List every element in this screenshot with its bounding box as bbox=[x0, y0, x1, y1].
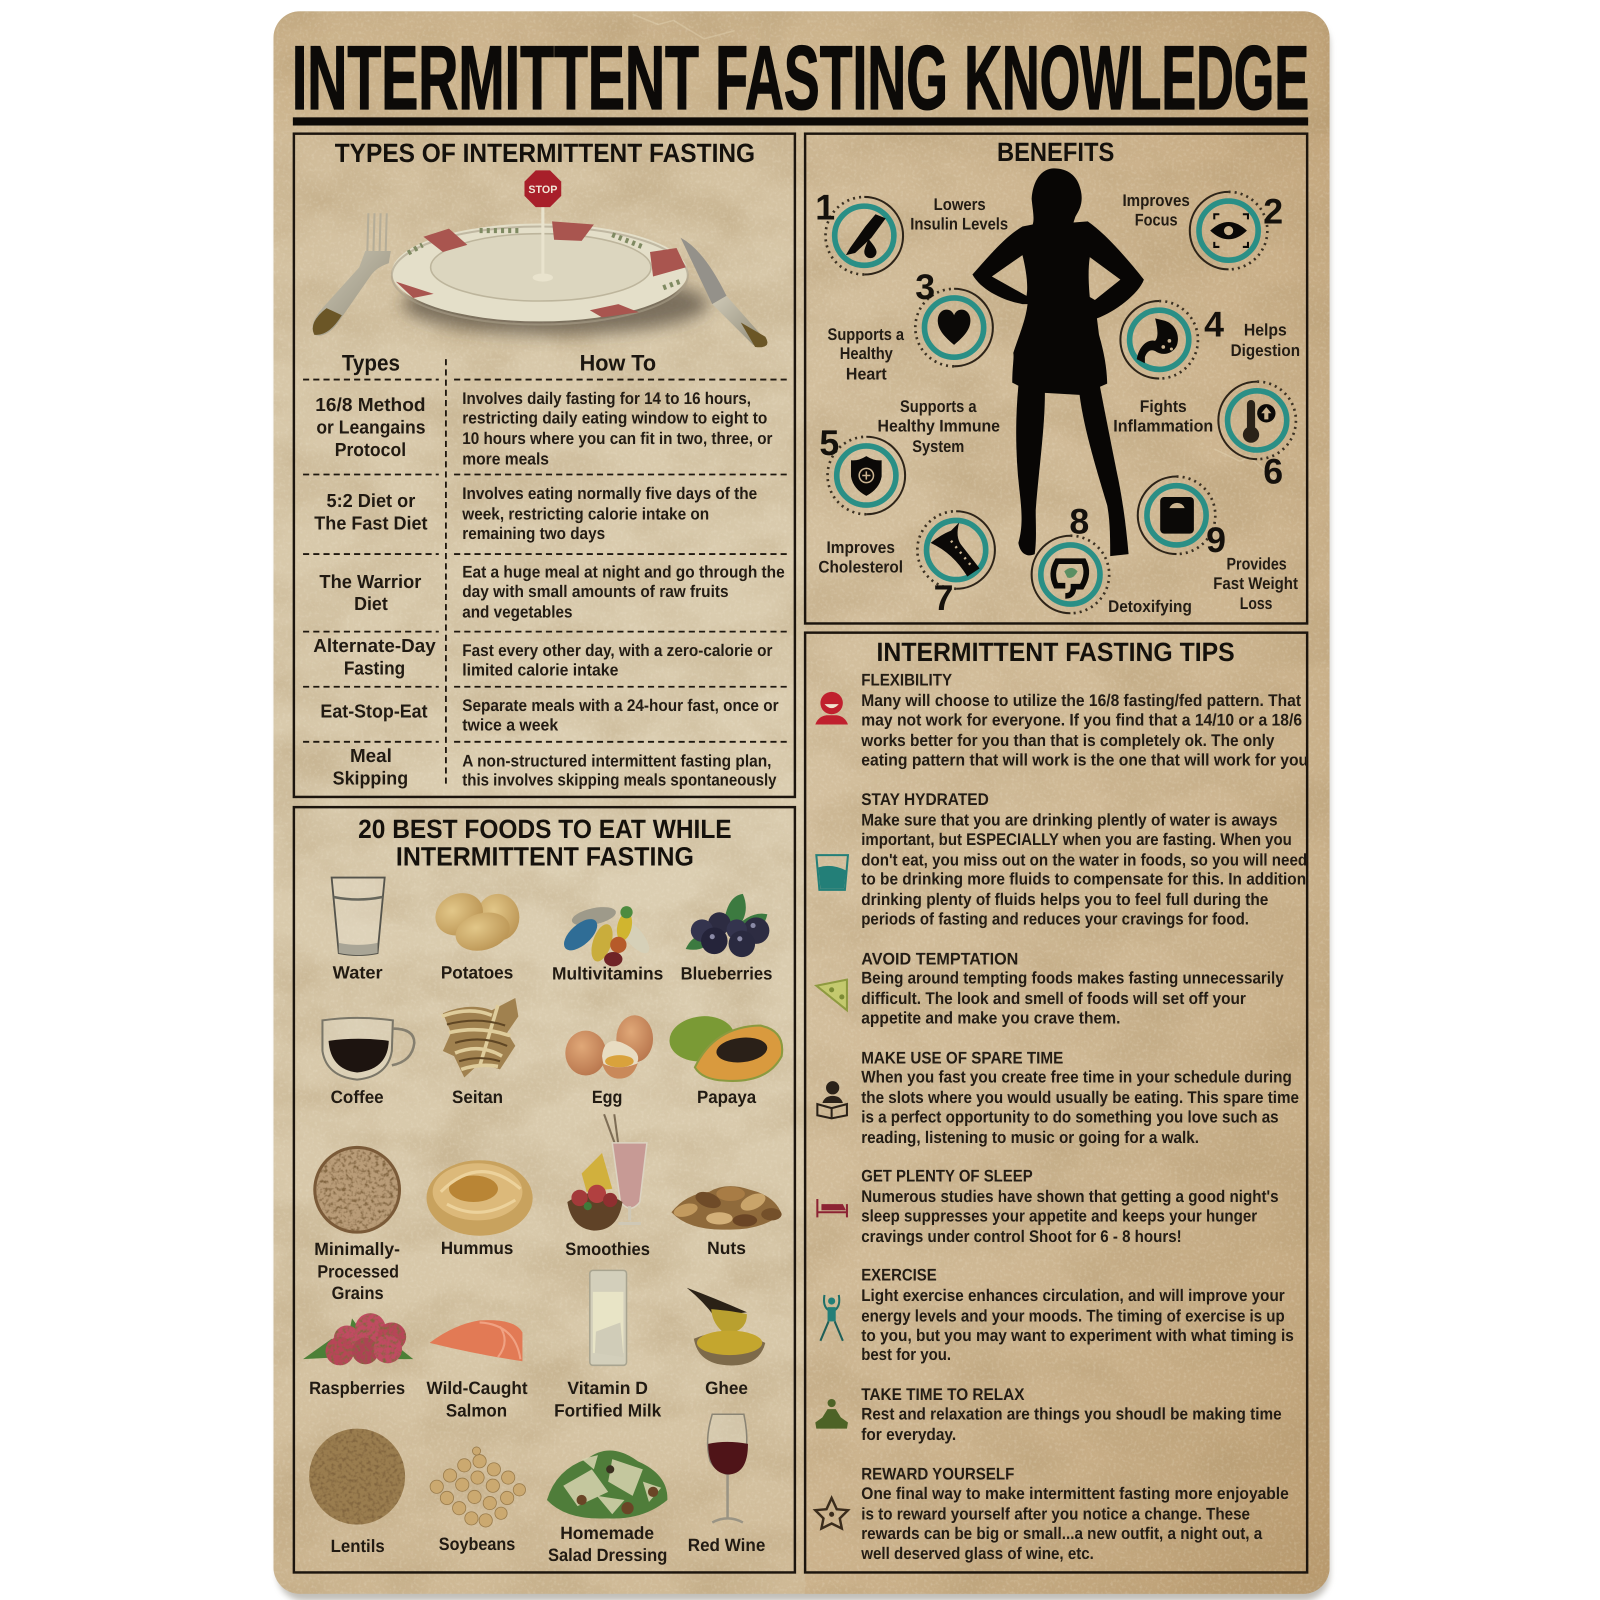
food: seitan bbox=[442, 998, 518, 1107]
table: types and how to: How To bbox=[580, 350, 656, 376]
food: homemade salad dressing: Homemade bbox=[560, 1522, 654, 1543]
food: papaya bbox=[667, 1013, 782, 1107]
row: alternate-day fasting: Fasting bbox=[344, 657, 405, 679]
tip: make use of spare time: MAKE USE OF SPARE TIME bbox=[861, 1049, 1063, 1067]
title: INTERMITTENT bbox=[292, 27, 699, 129]
benefit 7: improves cholesterol bbox=[818, 511, 995, 618]
benefit 7: improves cholesterol: Improves bbox=[827, 539, 895, 557]
icon: knife bbox=[681, 238, 767, 347]
row: warrior diet: day with small amounts of raw fruits bbox=[462, 583, 729, 601]
tip: flexibility: may not work for everyone. If you find that a 14/10 or a 18/6 bbox=[861, 711, 1302, 730]
row: warrior diet: Eat a huge meal at night and go through the bbox=[462, 563, 785, 582]
row: 16/8 method: or Leangains bbox=[316, 416, 426, 438]
food: potatoes: Potatoes bbox=[441, 962, 514, 983]
benefit 9: fast weight loss: 9 bbox=[1206, 520, 1226, 560]
tip: take time to relax bbox=[815, 1386, 1282, 1444]
icon: bed bbox=[817, 1199, 847, 1217]
title: FASTING bbox=[715, 27, 948, 129]
icon: happy person bbox=[815, 692, 848, 724]
food: red wine bbox=[688, 1414, 766, 1555]
benefit 9: fast weight loss bbox=[1138, 477, 1298, 613]
tip: take time to relax: for everyday. bbox=[861, 1426, 956, 1444]
food: multivitamins bbox=[552, 904, 664, 984]
tip: flexibility: FLEXIBILITY bbox=[861, 671, 952, 690]
tip: stay hydrated: Make sure that you are drinking plently of water is aways bbox=[861, 811, 1278, 830]
benefit 4: helps digestion: Helps bbox=[1244, 321, 1287, 340]
tip: avoid temptation bbox=[816, 950, 1284, 1028]
benefit 6: fights inflammation: Fights bbox=[1140, 398, 1187, 416]
food: wild-caught salmon bbox=[427, 1320, 528, 1420]
tip: avoid temptation: Being around tempting foods makes fasting unnecessarily bbox=[861, 969, 1284, 988]
row: eat-stop-eat: Eat-Stop-Eat bbox=[320, 700, 428, 721]
tip: make use of spare time: When you fast you create free time in your schedule during bbox=[861, 1068, 1292, 1087]
food: coffee bbox=[322, 1018, 414, 1107]
benefit 6: fights inflammation bbox=[1113, 382, 1296, 492]
row: 16/8 method: Involves daily fasting for 14 to 16 hours, bbox=[462, 390, 751, 408]
tip: exercise: energy levels and your moods. The timing of exercise is up bbox=[861, 1307, 1285, 1326]
tip: reward yourself: is to reward yourself after you notice a change. These bbox=[861, 1505, 1250, 1523]
panel heading: best foods: INTERMITTENT FASTING bbox=[396, 841, 694, 871]
tip: exercise: to you, but you may want to experiment with what timing is bbox=[861, 1327, 1294, 1345]
benefit 5: healthy immune system: Healthy Immune bbox=[878, 417, 1000, 436]
benefit 3: healthy heart: 3 bbox=[915, 267, 935, 307]
food: soybeans bbox=[430, 1447, 526, 1554]
benefit 9: fast weight loss: Provides bbox=[1227, 555, 1287, 573]
food: vitamin d fortified milk: Fortified Milk bbox=[554, 1400, 661, 1420]
row: meal skipping: A non-structured intermittent fasting plan, bbox=[462, 752, 771, 770]
food: egg: Egg bbox=[592, 1087, 622, 1107]
tip: avoid temptation: difficult. The look and smell of foods will set off your bbox=[861, 990, 1246, 1008]
icon: person reading bbox=[817, 1081, 847, 1118]
tip: stay hydrated: to be drinking more fluids to compensate for this. In addition bbox=[861, 870, 1306, 889]
row: 5:2 diet: Involves eating normally five days of the bbox=[462, 485, 757, 503]
icon: water glass bbox=[816, 855, 848, 890]
tip: flexibility: works better for you than that is completely ok. The only bbox=[860, 732, 1275, 750]
row: 16/8 method: more meals bbox=[462, 450, 549, 468]
tip: avoid temptation: AVOID TEMPTATION bbox=[861, 950, 1018, 968]
tip: flexibility: Many will choose to utilize the 16/8 fasting/fed pattern. That bbox=[861, 692, 1301, 710]
tip: make use of spare time: is a perfect opportunity to do something you love such as bbox=[861, 1108, 1279, 1127]
panel heading: types: TYPES OF INTERMITTENT FASTING bbox=[335, 138, 755, 168]
tip: stay hydrated: drinking plenty of fluids helps you to feel full during the bbox=[861, 891, 1268, 909]
icon: star bbox=[815, 1498, 848, 1529]
illustration: plate with stop sign, fork and knife bbox=[312, 170, 767, 347]
row: 5:2 diet bbox=[314, 485, 757, 543]
benefit 6: fights inflammation: Inflammation bbox=[1113, 417, 1213, 436]
benefit 3: healthy heart bbox=[828, 267, 993, 384]
food: papaya: Papaya bbox=[697, 1087, 756, 1107]
food: multivitamins: Multivitamins bbox=[552, 963, 664, 984]
row: eat-stop-eat: twice a week bbox=[462, 716, 559, 735]
row: meal skipping: this involves skipping meals spontaneously bbox=[462, 771, 777, 790]
tip: stay hydrated bbox=[816, 791, 1307, 929]
food: homemade salad dressing bbox=[547, 1450, 667, 1565]
food: water: Water bbox=[333, 962, 383, 983]
tip: reward yourself bbox=[815, 1465, 1289, 1563]
row: meal skipping bbox=[333, 745, 777, 790]
food: hummus: Hummus bbox=[441, 1238, 514, 1258]
row: warrior diet: and vegetables bbox=[462, 603, 572, 621]
food: minimally-processed grains bbox=[313, 1146, 401, 1303]
tip: exercise: Light exercise enhances circulation, and will improve your bbox=[861, 1287, 1285, 1305]
food: minimally-processed grains: Grains bbox=[332, 1283, 384, 1303]
row: 5:2 diet: The Fast Diet bbox=[314, 512, 428, 534]
food: smoothies bbox=[565, 1114, 650, 1259]
food: nuts bbox=[671, 1186, 782, 1258]
food: vitamin d fortified milk: Vitamin D bbox=[567, 1378, 648, 1398]
food: smoothies: Smoothies bbox=[565, 1239, 650, 1259]
icon: exercising figure bbox=[820, 1295, 843, 1341]
food: ghee bbox=[687, 1288, 765, 1398]
benefit 3: healthy heart: Heart bbox=[846, 365, 887, 384]
food: nuts: Nuts bbox=[707, 1238, 746, 1258]
row: meal skipping: Skipping bbox=[333, 767, 408, 789]
benefit 5: healthy immune system bbox=[819, 398, 1000, 514]
row: 16/8 method: 10 hours where you can fit in two, three, or bbox=[462, 430, 773, 448]
benefit 3: healthy heart: Healthy bbox=[840, 345, 894, 363]
benefit 1: lowers insulin levels bbox=[815, 188, 1008, 274]
title rule bbox=[293, 117, 1308, 126]
row: eat-stop-eat bbox=[320, 697, 779, 735]
benefit 7: improves cholesterol: 7 bbox=[934, 579, 954, 618]
row: alternate-day fasting: Fast every other day, with a zero-calorie or bbox=[462, 642, 773, 660]
icon: pizza slice bbox=[816, 980, 847, 1010]
food: vitamin d fortified milk bbox=[554, 1270, 661, 1420]
food: potatoes bbox=[428, 885, 519, 983]
benefit 8: detoxifying: 8 bbox=[1069, 502, 1089, 542]
food: coffee: Coffee bbox=[331, 1087, 384, 1107]
panel heading: best foods bbox=[358, 813, 732, 871]
tip: take time to relax: Rest and relaxation are things you shoudl be making time bbox=[861, 1405, 1282, 1423]
title: KNOWLEDGE bbox=[964, 27, 1309, 129]
panel: 20 best foods bbox=[294, 807, 795, 1572]
food: lentils bbox=[309, 1429, 405, 1556]
tip: get plenty of sleep: sleep suppresses your appetite and keeps your hunger bbox=[861, 1207, 1258, 1226]
row: 16/8 method: restricting daily eating window to eight to bbox=[462, 409, 767, 428]
tip: reward yourself: One final way to make intermittent fasting more enjoyable bbox=[861, 1485, 1289, 1503]
food: wild-caught salmon: Wild-Caught bbox=[427, 1378, 528, 1398]
benefit 4: helps digestion: Digestion bbox=[1231, 342, 1300, 360]
benefit 6: fights inflammation: 6 bbox=[1263, 452, 1283, 492]
tip: get plenty of sleep bbox=[817, 1167, 1279, 1246]
benefit 5: healthy immune system: 5 bbox=[819, 423, 839, 463]
panel heading: benefits: BENEFITS bbox=[997, 137, 1114, 167]
food: red wine: Red Wine bbox=[688, 1535, 766, 1555]
row: warrior diet bbox=[319, 563, 785, 621]
row: alternate-day fasting bbox=[313, 635, 773, 680]
benefit 2: improves focus: 2 bbox=[1263, 192, 1283, 232]
poster background bbox=[273, 11, 1330, 1600]
panel: types of intermittent fasting bbox=[294, 134, 795, 797]
tip: make use of spare time: reading, listening to music or going for a walk. bbox=[861, 1129, 1199, 1147]
panel: intermittent fasting tips bbox=[805, 633, 1308, 1572]
title bbox=[292, 27, 1309, 129]
food: hummus bbox=[427, 1160, 533, 1258]
icon: meditating figure bbox=[815, 1399, 848, 1429]
icon: stop sign bbox=[524, 170, 561, 282]
tip: reward yourself: REWARD YOURSELF bbox=[861, 1465, 1014, 1484]
benefit 8: detoxifying bbox=[1032, 502, 1192, 616]
tip: reward yourself: well deserved glass of wine, etc. bbox=[860, 1545, 1094, 1563]
tip: make use of spare time bbox=[817, 1049, 1299, 1147]
benefit 9: fast weight loss: Loss bbox=[1240, 595, 1272, 613]
benefit 1: lowers insulin levels: Insulin Levels bbox=[910, 215, 1008, 234]
tip: get plenty of sleep: Numerous studies have shown that getting a good night's bbox=[861, 1188, 1279, 1206]
tip: stay hydrated: important, but ESPECIALLY when you are fasting. When you bbox=[861, 831, 1292, 849]
food: water bbox=[332, 878, 385, 983]
food: blueberries: Blueberries bbox=[681, 963, 773, 984]
table: types and how to bbox=[303, 350, 789, 790]
tip: avoid temptation: appetite and make you crave them. bbox=[861, 1009, 1120, 1028]
tip: stay hydrated: STAY HYDRATED bbox=[861, 791, 989, 809]
panel heading: best foods: 20 BEST FOODS TO EAT WHILE bbox=[358, 813, 732, 844]
icon: stop sign: STOP bbox=[528, 184, 557, 196]
tip: flexibility bbox=[815, 671, 1308, 769]
tip: reward yourself: rewards can be big or small...a new outfit, a night out, a bbox=[861, 1524, 1263, 1543]
benefit 2: improves focus: Improves bbox=[1122, 192, 1190, 210]
row: alternate-day fasting: Alternate-Day bbox=[313, 635, 436, 656]
food: seitan: Seitan bbox=[452, 1087, 503, 1107]
row: eat-stop-eat: Separate meals with a 24-hour fast, once or bbox=[462, 697, 779, 715]
benefit 2: improves focus bbox=[1122, 192, 1283, 269]
benefit 1: lowers insulin levels: 1 bbox=[815, 188, 835, 228]
tip: stay hydrated: don't eat, you miss out on the water in foods, so you will need bbox=[861, 851, 1307, 869]
row: warrior diet: Diet bbox=[354, 593, 388, 614]
benefit 7: improves cholesterol: Cholesterol bbox=[818, 558, 903, 577]
tip: take time to relax: TAKE TIME TO RELAX bbox=[861, 1386, 1024, 1404]
benefit 4: helps digestion bbox=[1120, 301, 1300, 379]
row: 16/8 method: Protocol bbox=[335, 439, 406, 460]
benefit 5: healthy immune system: System bbox=[912, 438, 964, 456]
tip: exercise bbox=[820, 1266, 1294, 1364]
food: egg bbox=[565, 1015, 653, 1107]
tip: exercise: best for you. bbox=[861, 1346, 951, 1364]
table: types and how to: Types bbox=[342, 350, 400, 376]
food: homemade salad dressing: Salad Dressing bbox=[548, 1545, 667, 1565]
benefit 5: healthy immune system: Supports a bbox=[900, 398, 977, 416]
row: 16/8 method: 16/8 Method bbox=[315, 394, 426, 415]
food: minimally-processed grains: Minimally- bbox=[314, 1239, 400, 1259]
tip: get plenty of sleep: cravings under control Shoot for 6 - 8 hours! bbox=[861, 1228, 1182, 1246]
food: wild-caught salmon: Salmon bbox=[446, 1400, 507, 1420]
row: 16/8 method bbox=[315, 390, 773, 468]
panel: benefits bbox=[805, 134, 1307, 623]
tip: make use of spare time: the slots where you would usually be eating. This spare time bbox=[861, 1089, 1299, 1107]
food: blueberries bbox=[681, 894, 773, 984]
panel heading: tips: INTERMITTENT FASTING TIPS bbox=[877, 637, 1235, 667]
tip: stay hydrated: periods of fasting and reduces your cravings for food. bbox=[861, 910, 1249, 929]
benefit 3: healthy heart: Supports a bbox=[828, 326, 905, 344]
food: raspberries bbox=[303, 1313, 413, 1398]
benefit 2: improves focus: Focus bbox=[1135, 211, 1178, 230]
food: ghee: Ghee bbox=[705, 1378, 748, 1398]
tip: exercise: EXERCISE bbox=[861, 1266, 937, 1285]
benefit 4: helps digestion: 4 bbox=[1204, 305, 1224, 345]
icon: fork bbox=[312, 213, 391, 336]
row: meal skipping: Meal bbox=[350, 745, 392, 766]
benefit 1: lowers insulin levels: Lowers bbox=[934, 196, 986, 214]
benefit 8: detoxifying: Detoxifying bbox=[1108, 598, 1192, 616]
row: 5:2 diet: 5:2 Diet or bbox=[327, 490, 415, 511]
food: lentils: Lentils bbox=[331, 1536, 385, 1556]
row: warrior diet: The Warrior bbox=[319, 570, 421, 592]
row: 5:2 diet: week, restricting calorie intake on bbox=[461, 505, 709, 523]
row: alternate-day fasting: limited calorie intake bbox=[462, 661, 618, 680]
row: 5:2 diet: remaining two days bbox=[462, 524, 605, 543]
tip: flexibility: eating pattern that will work is the one that will work for you bbox=[861, 751, 1308, 769]
food: raspberries: Raspberries bbox=[309, 1378, 405, 1398]
tip: get plenty of sleep: GET PLENTY OF SLEEP bbox=[861, 1167, 1033, 1186]
food: minimally-processed grains: Processed bbox=[317, 1261, 399, 1282]
benefit 9: fast weight loss: Fast Weight bbox=[1213, 574, 1298, 593]
silhouette: woman with hands on hips bbox=[972, 168, 1144, 556]
food: soybeans: Soybeans bbox=[439, 1534, 516, 1554]
